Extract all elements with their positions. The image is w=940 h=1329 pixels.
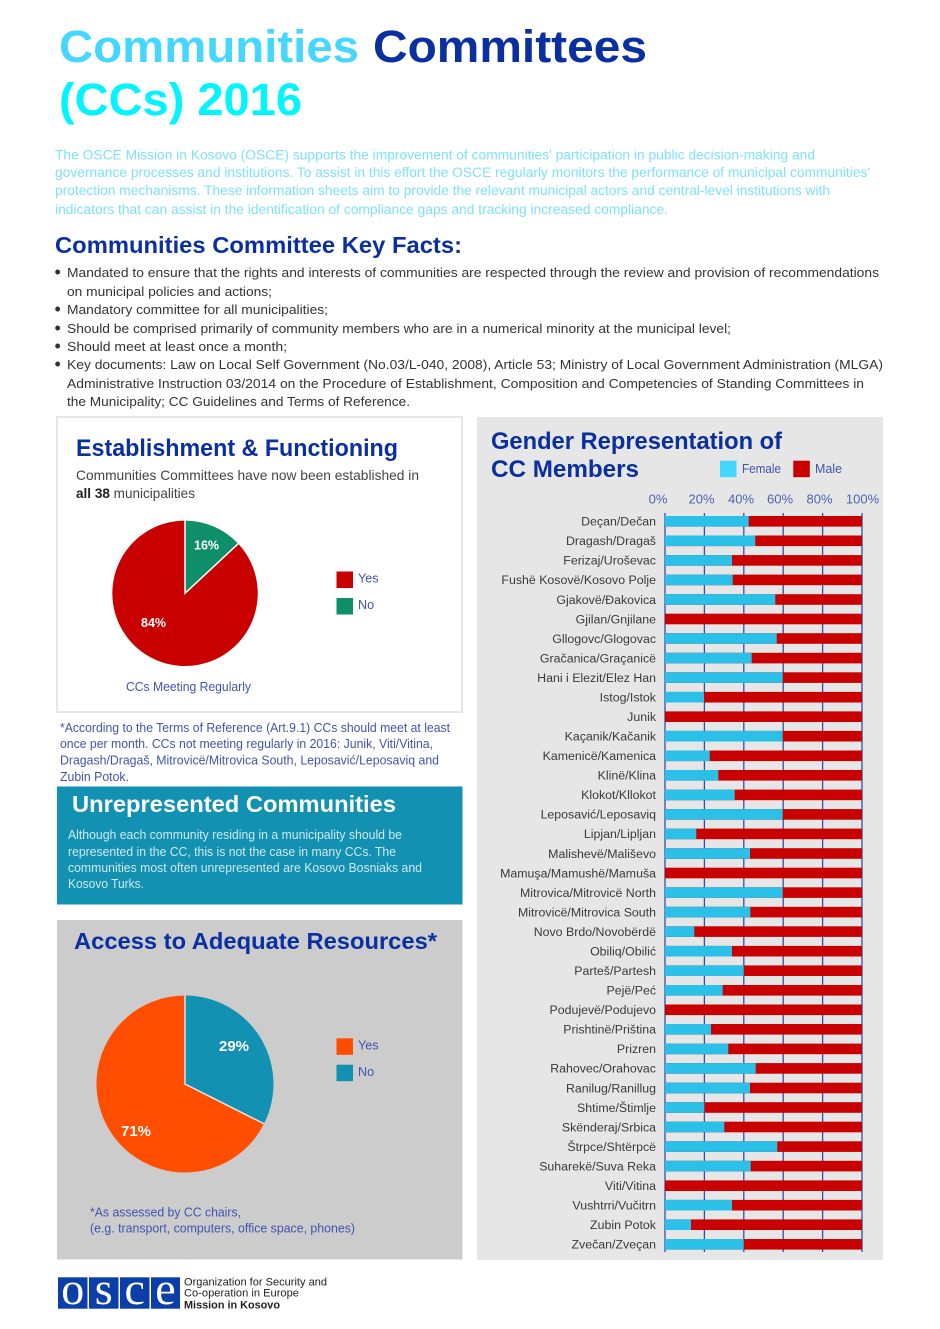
heading: unrepresented: Unrepresented Communities xyxy=(72,791,396,817)
row: Prizren xyxy=(617,1042,862,1056)
pie chart: CCs meeting regularly: 16% xyxy=(194,538,219,552)
row: Ferizaj xyxy=(563,554,862,568)
OSCE logo: o xyxy=(61,1263,84,1314)
row: Obiliq xyxy=(590,944,862,958)
key facts list: • xyxy=(54,318,61,338)
row: Dragash: Dragash/Dragaš xyxy=(566,534,656,548)
axis labels: 60% xyxy=(767,492,793,506)
row: Fushë Kosovë xyxy=(501,573,862,587)
key facts list: • xyxy=(54,354,61,374)
heading: gender representation: CC Members xyxy=(491,456,639,483)
row: Rahovec: Rahovec/Orahovac xyxy=(550,1062,656,1076)
panel: establishment and functioning xyxy=(57,417,462,712)
key facts list: • xyxy=(54,336,61,356)
key facts list: • xyxy=(54,299,61,319)
unrepresented text: Kosovo Turks. xyxy=(68,877,144,891)
footnote: terms of reference: *According to the Terms of Reference (Art.9.1) CCs should meet at least xyxy=(60,721,450,735)
row: Hani i Elezit xyxy=(537,671,862,685)
footnote: terms of reference: Dragash/Dragaš, Mitrovicë/Mitrovica South, Leposavić/Leposaviq and xyxy=(60,754,439,768)
row: Junik xyxy=(627,710,862,724)
row: Klokot xyxy=(581,788,862,802)
legend: yes no: No xyxy=(358,598,374,612)
organization name xyxy=(184,1276,327,1311)
row: Ranilug xyxy=(566,1081,862,1095)
pie chart: CCs meeting regularly: 84% xyxy=(141,616,166,630)
heading: establishment: Establishment & Functioning xyxy=(76,435,398,462)
row: Viti xyxy=(605,1179,862,1193)
row: Vushtrri: Vushtrri/Vučitrn xyxy=(572,1198,656,1212)
key facts list: Should be comprised primarily of community members who are in a numerical minority at the municipal level; xyxy=(67,321,731,336)
establishment text xyxy=(76,468,419,501)
row: Mitrovica North xyxy=(520,886,862,900)
row: Kamenicë xyxy=(543,749,862,763)
footnote: assessed by chairs: *As assessed by CC chairs, xyxy=(90,1206,241,1220)
row: Mitrovica North: Mitrovica/Mitrovicë North xyxy=(520,886,656,900)
row: Deçan: Deçan/Dečan xyxy=(581,515,656,529)
key facts list: the Municipality; CC Guidelines and Terms of Reference. xyxy=(67,394,410,409)
row: Gjakovë: Gjakovë/Đakovica xyxy=(556,593,656,607)
row: Mamuşa xyxy=(500,866,862,880)
row: Lipjan xyxy=(584,827,862,841)
unrepresented text: Although each community residing in a municipality should be xyxy=(68,828,402,842)
heading: gender representation: Gender Representation of xyxy=(491,428,783,455)
organization name: Mission in Kosovo xyxy=(184,1299,281,1311)
row: Deçan xyxy=(581,515,862,529)
axis labels: 20% xyxy=(688,492,715,506)
legend: yes no: Yes xyxy=(358,572,379,586)
intro text: indicators that can assist in the identification of compliance gaps and tracking increased compliance. xyxy=(55,202,668,217)
row: Parteš xyxy=(574,964,862,978)
row: Prizren: Prizren xyxy=(617,1042,656,1056)
OSCE logo xyxy=(58,1263,327,1314)
panel: unrepresented communities xyxy=(57,786,462,904)
unrepresented text: represented in the CC, this is not the case in many CCs. The xyxy=(68,845,396,859)
pie chart: CCs meeting regularly xyxy=(112,520,258,666)
row: Gjilan: Gjilan/Gnjilane xyxy=(576,612,656,626)
key facts list: Key documents: Law on Local Self Government (No.03/L-040, 2008), Article 53; Ministry of Local Government Administration (MLGA) xyxy=(67,357,883,372)
legend: female male: Male xyxy=(815,462,842,476)
row: Zvečan: Zvečan/Zveçan xyxy=(572,1238,656,1252)
row: Novo Brdo xyxy=(534,925,862,939)
row: Mamuşa: Mamuşa/Mamushë/Mamuša xyxy=(500,866,656,880)
row: Kaçanik xyxy=(565,730,862,744)
row: Skënderaj: Skënderaj/Srbica xyxy=(562,1120,656,1134)
row: Štrpce: Štrpce/Shtërpcë xyxy=(567,1139,656,1154)
row: Gračanica xyxy=(540,651,862,665)
heading: access: Access to Adequate Resources* xyxy=(74,928,438,954)
panel: access to adequate resources xyxy=(57,920,462,1260)
footnote: terms of reference: Zubin Potok. xyxy=(60,770,129,784)
establishment text: Communities Committees have now been established in xyxy=(76,468,419,483)
legend: yes no: Yes xyxy=(358,1038,379,1052)
row: Gjilan xyxy=(576,612,862,626)
footnote: terms of reference xyxy=(60,721,450,784)
unrepresented text xyxy=(68,828,422,891)
row: Kamenicë: Kamenicë/Kamenica xyxy=(543,749,656,763)
title: (CCs) 2016 xyxy=(59,74,302,125)
key facts list: Mandated to ensure that the rights and interests of communities are respected through the review and provision of recommendations xyxy=(67,265,879,280)
axis labels: 40% xyxy=(728,492,754,506)
row: Pejë xyxy=(607,984,862,998)
establishment text: all 38 municipalities xyxy=(76,486,195,501)
row: Obiliq: Obiliq/Obilić xyxy=(590,944,656,958)
axis labels: 0% xyxy=(649,492,668,506)
row: Rahovec xyxy=(550,1062,862,1076)
row: Mitrovica South xyxy=(518,905,862,919)
row: Dragash xyxy=(566,534,862,548)
row: Lipjan: Lipjan/Lipljan xyxy=(584,827,656,841)
chart caption: CCs Meeting Regularly xyxy=(126,680,252,694)
row: Podujevë xyxy=(549,1003,862,1017)
OSCE logo: s xyxy=(95,1263,113,1314)
row: Novo Brdo: Novo Brdo/Novobërdë xyxy=(534,925,656,939)
key facts list xyxy=(54,262,883,409)
axis labels: 100% xyxy=(846,492,880,506)
axis labels: 80% xyxy=(806,492,833,506)
intro text: protection mechanisms. These information sheets aim to provide the relevant municipal actors and central-level institutions with xyxy=(55,183,830,198)
row: Zubin Potok xyxy=(590,1218,862,1232)
row: Zubin Potok: Zubin Potok xyxy=(590,1218,657,1232)
row: Klinë: Klinë/Klina xyxy=(598,769,656,783)
row: Shtime xyxy=(577,1100,862,1115)
footnote: terms of reference: once per month. CCs not meeting regularly in 2016: Junik, Viti/Vitina, xyxy=(60,737,433,751)
row: Leposavić: Leposavić/Leposaviq xyxy=(541,808,656,822)
row: Gllogovc: Gllogovc/Glogovac xyxy=(552,632,656,646)
row: Zvečan xyxy=(572,1238,862,1252)
axis labels xyxy=(649,492,880,506)
legend: yes no xyxy=(336,572,379,614)
legend: yes no: No xyxy=(358,1065,374,1079)
row: Suharekë xyxy=(539,1159,862,1173)
pie chart: adequate resources: 29% xyxy=(219,1038,249,1055)
unrepresented text: communities most often unrepresented are Kosovo Bosniaks and xyxy=(68,861,422,875)
organization name: Organization for Security and xyxy=(184,1276,327,1288)
legend: female male: Female xyxy=(742,462,781,476)
grid lines xyxy=(665,513,862,1252)
row: Klinë xyxy=(598,769,862,783)
title xyxy=(59,21,647,125)
footnote: assessed by chairs xyxy=(90,1206,355,1236)
row: Klokot: Klokot/Kllokot xyxy=(581,788,657,802)
legend: female male xyxy=(720,461,842,477)
organization name: Co-operation in Europe xyxy=(184,1288,299,1300)
row: Štrpce xyxy=(567,1139,862,1154)
row: Suharekë: Suharekë/Suva Reka xyxy=(539,1159,656,1173)
intro text: The OSCE Mission in Kosovo (OSCE) supports the improvement of communities' participation in public decision-making and xyxy=(55,148,815,162)
row: Gllogovc xyxy=(552,632,862,646)
row: Vushtrri xyxy=(572,1198,862,1212)
row: Podujevë: Podujevë/Podujevo xyxy=(549,1003,656,1017)
intro text: governance processes and institutions. To assist in this effort the OSCE regularly monitors the performance of municipal communities' xyxy=(55,165,870,180)
panel: gender representation xyxy=(477,417,883,1260)
row: Leposavić xyxy=(541,808,862,822)
row: Hani i Elezit: Hani i Elezit/Elez Han xyxy=(537,671,656,685)
row: Ferizaj: Ferizaj/Uroševac xyxy=(563,554,656,568)
key facts list: Mandatory committee for all municipalities; xyxy=(67,302,328,317)
OSCE logo: c xyxy=(124,1263,145,1314)
title: Committees xyxy=(373,21,647,72)
row: Istog xyxy=(600,690,862,704)
legend: yes no xyxy=(336,1038,379,1081)
row: Pejë: Pejë/Peć xyxy=(607,984,656,998)
pie chart: adequate resources xyxy=(96,995,273,1172)
row: Mitrovica South: Mitrovicë/Mitrovica South xyxy=(518,905,656,919)
title: Communities xyxy=(59,21,359,72)
heading: gender representation xyxy=(491,428,783,483)
row: Shtime: Shtime/Štimlje xyxy=(577,1100,656,1115)
key facts list: Administrative Instruction 03/2014 on the Procedure of Establishment, Composition and Competencies of Standing Committees in xyxy=(67,376,864,391)
footnote: assessed by chairs: (e.g. transport, computers, office space, phones) xyxy=(90,1222,355,1236)
row: Parteš: Parteš/Partesh xyxy=(574,964,656,978)
row: Viti: Viti/Vitina xyxy=(605,1179,656,1193)
row: Junik: Junik xyxy=(627,710,657,724)
row: Prishtinë xyxy=(563,1023,862,1037)
intro text xyxy=(55,148,870,217)
OSCE logo: e xyxy=(155,1263,176,1314)
row: Prishtinë: Prishtinë/Priština xyxy=(563,1023,656,1037)
key facts list: Should meet at least once a month; xyxy=(67,339,287,354)
row: Skënderaj xyxy=(562,1120,862,1134)
row: Malishevë xyxy=(548,847,862,861)
heading: key facts: Communities Committee Key Facts: xyxy=(55,232,462,258)
row: Kaçanik: Kaçanik/Kačanik xyxy=(565,730,657,744)
key facts list: on municipal policies and actions; xyxy=(67,284,272,299)
row: Fushë Kosovë: Fushë Kosovë/Kosovo Polje xyxy=(501,573,656,587)
row: Istog: Istog/Istok xyxy=(600,690,657,704)
pie chart: adequate resources: 71% xyxy=(121,1123,151,1140)
key facts list: • xyxy=(54,262,61,282)
row: Gjakovë xyxy=(556,593,862,607)
row: Malishevë: Malishevë/Mališevo xyxy=(548,847,656,861)
row: Gračanica: Gračanica/Graçanicë xyxy=(540,651,656,665)
row: Ranilug: Ranilug/Ranillug xyxy=(566,1081,656,1095)
